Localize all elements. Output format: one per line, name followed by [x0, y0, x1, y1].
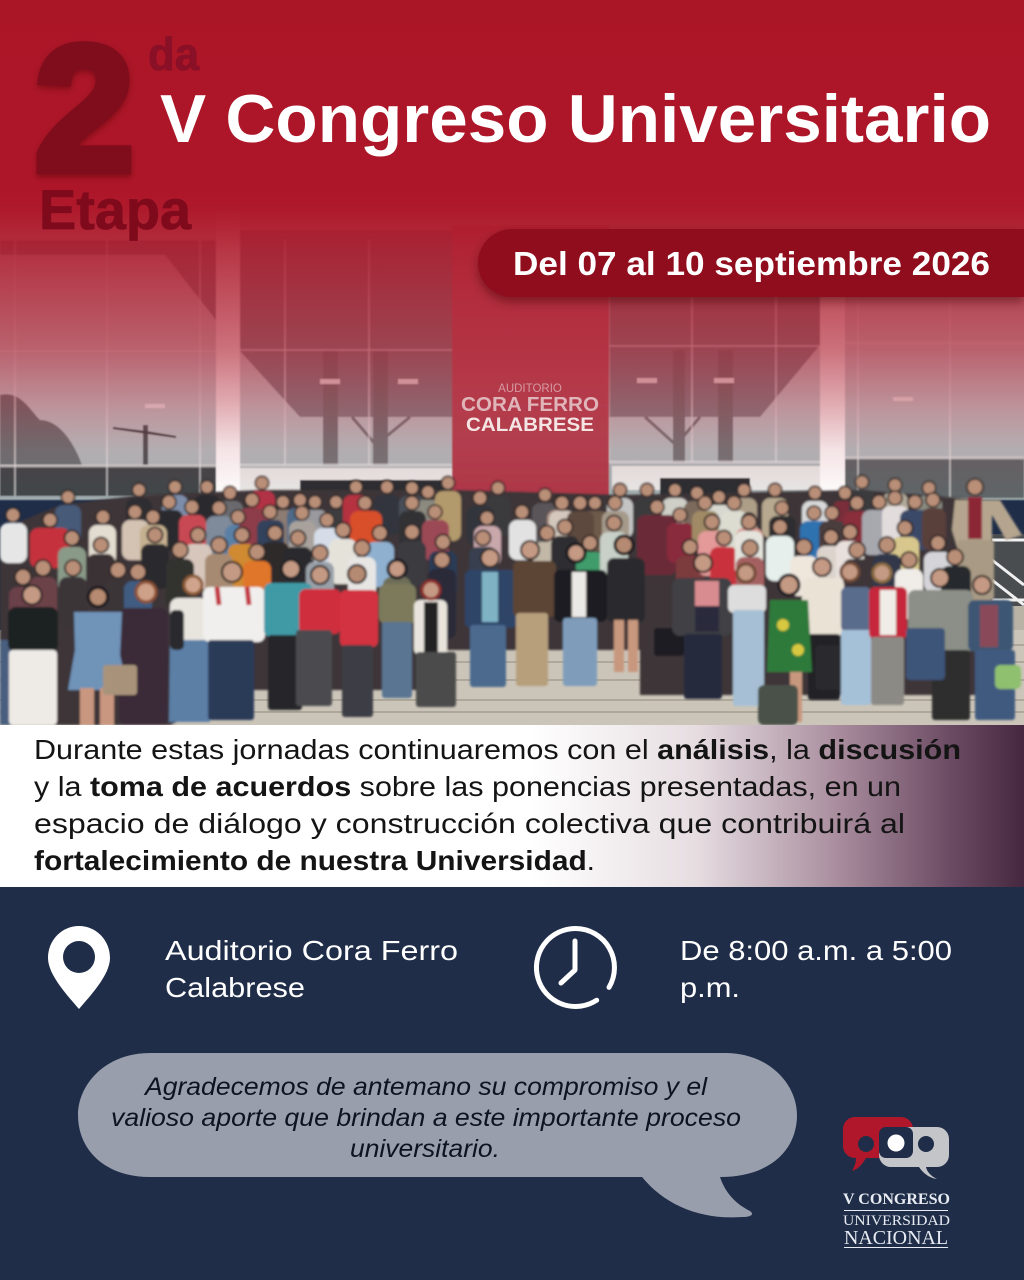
person: white t-shirt navy pants [203, 562, 265, 720]
person: black top white pants [0, 586, 58, 725]
callout text: valioso aporte que brindan a este importante proceso [111, 1104, 741, 1132]
fourth row people [9, 537, 971, 639]
da label: da [148, 28, 199, 80]
person: black dress [607, 536, 645, 672]
callout text: Agradecemos de antemano su compromiso y el [143, 1073, 709, 1101]
crowd [0, 476, 1022, 725]
crowd dark mass [0, 490, 1015, 725]
location text [165, 935, 458, 1003]
description text: fortalecimiento de nuestra Universidad . [34, 845, 595, 876]
schedule text: De 8:00 a.m. a 5:00 [680, 935, 952, 966]
big numeral 2: 2 [35, 9, 134, 208]
callout speech bubble [78, 1053, 797, 1217]
person: red una shirt 2 [340, 565, 378, 717]
person: olive top jeans [379, 560, 416, 698]
second row people [0, 491, 946, 575]
auditorium sign: CORA FERRO [461, 394, 599, 416]
schedule text [680, 935, 952, 1003]
building facade [0, 190, 1024, 502]
callout text: universitario. [350, 1135, 500, 1163]
person: patterned dress [119, 582, 168, 725]
person: white top jeans [728, 564, 766, 706]
person: white cardigan checker pants [414, 581, 456, 707]
location text: Auditorio Cora Ferro [165, 935, 458, 966]
person: red una shirt [296, 566, 341, 706]
person in tan blazer at right [952, 479, 1022, 600]
stairs [0, 600, 1024, 725]
person: teal shirt [264, 560, 312, 710]
front row people [0, 536, 1021, 725]
logo text: V CONGRESO [843, 1191, 950, 1208]
description text: y la toma de acuerdos sobre las ponencias presentadas, en un [34, 771, 901, 802]
person: black jacket jeans [554, 544, 607, 686]
back row people [55, 476, 942, 551]
logo: V Congreso Universidad Nacional [843, 1117, 950, 1249]
person: grey jacket [672, 554, 732, 699]
logo text: NACIONAL [844, 1227, 948, 1249]
icon: location pin [48, 926, 110, 1009]
third row people [58, 514, 952, 601]
person: cream sweater [802, 558, 845, 700]
description band [0, 725, 1024, 887]
auditorium sign [461, 383, 599, 436]
person: floral jacket jeans [841, 563, 871, 705]
right railing [990, 534, 1024, 606]
description text: espacio de diálogo y construcción colectiva que contribuirá al [34, 808, 905, 839]
logo text: UNIVERSIDAD [843, 1213, 950, 1229]
date text: Del 07 al 10 septiembre 2026 [513, 245, 990, 282]
person: black bag on stairs [654, 628, 684, 656]
icon: clock [536, 928, 614, 1006]
person: blue dress [68, 588, 137, 725]
photo: building and crowd [0, 0, 1024, 725]
person: brown shirt khaki pants [513, 541, 556, 686]
callout text [111, 1073, 741, 1163]
person: red jacket [869, 564, 907, 705]
person: denim jacket [968, 576, 1021, 720]
date pill [478, 229, 1024, 297]
title: V Congreso Universitario [160, 81, 991, 157]
schedule text: p.m. [680, 972, 740, 1003]
person: grey polo with tote [906, 569, 973, 720]
logo icon: speech bubbles [843, 1117, 949, 1179]
description text: Durante estas jornadas continuaremos con el análisis , la discusión [34, 734, 961, 765]
person: navy blazer [465, 549, 517, 687]
Etapa label: Etapa [39, 178, 192, 241]
auditorium sign: AUDITORIO [498, 383, 562, 395]
logo text [843, 1191, 950, 1249]
auditorium sign: CALABRESE [466, 415, 594, 436]
description text [34, 734, 961, 876]
red gradient overlay [0, 0, 1024, 500]
person: white blouse and jeans [169, 576, 210, 722]
person: green dress [758, 575, 812, 725]
location text: Calabrese [165, 972, 305, 1003]
